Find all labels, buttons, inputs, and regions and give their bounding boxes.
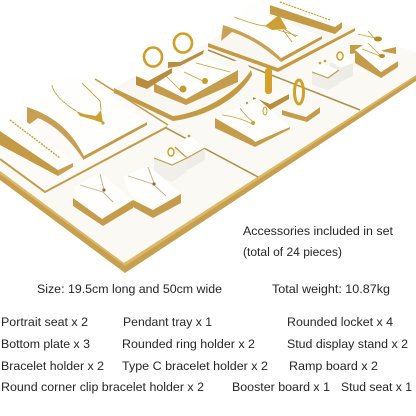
parts list: Booster board x 1 [232, 380, 330, 394]
accessories note: (total of 24 pieces) [243, 245, 342, 259]
size and weight: Size: 19.5cm long and 50cm wide [37, 282, 222, 296]
pendant seat B [123, 165, 181, 218]
ring holders and rings [136, 34, 204, 89]
arc plate [114, 60, 252, 121]
parts list: Ramp board x 2 [289, 359, 378, 373]
bracelet holder right [270, 0, 342, 34]
parts list: Bottom plate x 3 [1, 337, 90, 351]
necklace right [234, 15, 298, 42]
size and weight [37, 282, 390, 296]
right bust plate [208, 2, 355, 72]
left bottom plate [0, 78, 168, 192]
parts list: Rounded locket x 4 [287, 315, 393, 329]
round corner bracelet holders [253, 68, 320, 122]
accessories note [243, 224, 394, 259]
rounded locket blocks centre [312, 52, 353, 90]
bracelet holder left [0, 114, 73, 176]
parts list: Rounded ring holder x 2 [122, 337, 255, 351]
parts list: Round corner clip bracelet holder x 2 [1, 380, 204, 394]
parts list [1, 315, 412, 394]
size and weight: Total weight: 10.87kg [272, 282, 390, 296]
parts list: Stud seat x 1 [341, 380, 412, 394]
portrait bust left [27, 77, 147, 160]
parts list: Pendant tray x 1 [123, 315, 212, 329]
pendant tray [154, 56, 238, 105]
stud seats right [350, 27, 398, 78]
base boards [0, 2, 416, 273]
parts list: Bracelet holder x 2 [1, 359, 104, 373]
necklace left [52, 83, 105, 125]
portrait bust right [221, 1, 322, 62]
accessories note: Accessories included in set [243, 224, 394, 238]
ramp board [215, 98, 290, 147]
parts list: Portrait seat x 2 [1, 315, 88, 329]
pendant seat A [73, 172, 133, 226]
small blocks front [154, 135, 205, 182]
parts list: Type C bracelet holder x 2 [122, 359, 268, 373]
parts list: Stud display stand x 2 [287, 337, 408, 351]
